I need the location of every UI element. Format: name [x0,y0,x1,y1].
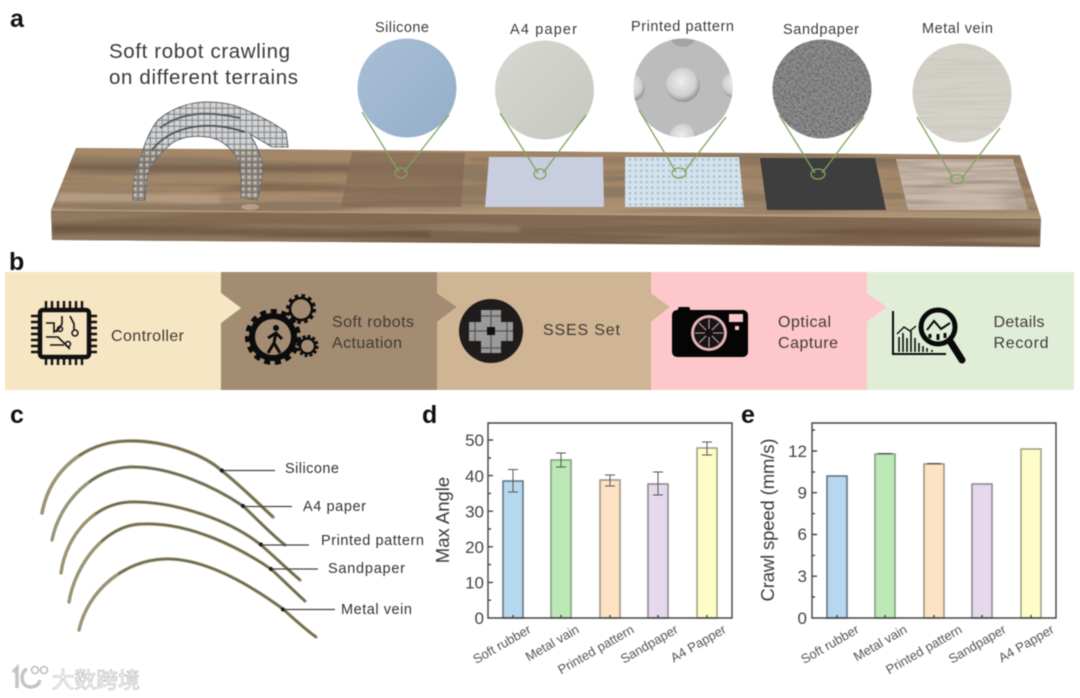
panel a: terrains [10,5,1050,253]
y-axis tick labels: 10 [465,574,484,592]
x-axis labels: Soft rubber [470,621,534,667]
step: optical capture [651,272,887,390]
error caps [878,454,941,464]
y-axis title: Max Angle [432,477,453,563]
zoom circle: printed pattern [633,38,733,180]
icon: camera [672,307,748,357]
text: optical capture: Capture [778,335,838,352]
label d: d [422,401,437,429]
x-axis labels: Printed pattern [883,622,964,677]
axes box [812,423,1056,618]
step: soft robots actuation [221,272,457,390]
text: soft robots actuation: Actuation [332,335,402,352]
x-axis labels: Soft rubber [798,621,862,667]
curve labels: Sandpaper [328,561,405,577]
panel b: workflow [5,248,1074,390]
text: optical capture: Optical [778,314,831,331]
zoom circle: A4 paper [495,40,594,179]
label e: e [741,401,755,429]
terrain patch: sandpaper [760,158,886,210]
text: details record [994,314,1048,352]
label b: b [9,248,24,276]
x-axis labels [798,621,1057,677]
bars [827,449,1041,618]
y-axis tick labels: 50 [465,431,484,450]
x-axis labels: A4 Papper [668,621,729,665]
icon: gears with walker [248,296,317,362]
x-axis labels: Sandpaper [946,621,1009,666]
panel d: max angle bar chart [422,401,732,677]
x-axis labels: Metal vain [523,622,582,664]
soft robot [133,102,288,210]
curve: metal vein [79,559,316,637]
y-axis tick labels [788,442,807,628]
text: SSES set: SSES Set [543,322,621,339]
text: soft robots actuation: Soft robots [332,314,414,331]
curve labels [285,461,424,618]
label a: a [10,5,25,33]
x-axis labels [470,621,729,677]
circle captions: Silicone [375,20,429,36]
step: controller [5,272,241,390]
curve labels: Printed pattern [321,533,424,549]
zoom circle: metal vein [910,41,1014,184]
x-axis labels: Printed pattern [555,622,636,677]
y-axis tick labels: 0 [475,609,484,628]
bars [503,448,717,618]
x-axis labels: Metal vain [851,622,910,664]
curve: printed pattern [61,502,300,580]
y-axis tick labels [465,431,484,628]
curve labels: Silicone [285,461,339,477]
circle captions: A4 paper [510,22,577,38]
terrain patch: silicone [341,152,465,207]
curve: silicone [42,441,273,517]
y-axis title: Crawl speed (mm/s) [757,438,778,602]
circle captions [375,19,993,38]
heading: soft robot crawling: Soft robot crawling [109,40,290,63]
wooden plank [40,145,1050,253]
x-axis labels: Sandpaper [618,621,681,666]
label c: c [10,401,24,429]
y-axis tick labels: 0 [798,609,807,628]
icon: chip [31,301,97,365]
heading: soft robot crawling [109,40,298,89]
text: controller: Controller [111,328,185,345]
step: SSES set [437,272,670,390]
zoom circle: sandpaper [770,37,874,179]
y-axis tick labels: 6 [798,525,807,544]
terrain patch: printed pattern [625,157,744,207]
y-axis tick labels: 40 [465,467,484,486]
text: details record: Record [994,335,1048,352]
y-axis tick labels: 9 [798,484,807,502]
y-axis tick labels: 30 [465,502,484,522]
heading: soft robot crawling: on different terrains [109,66,298,89]
circle captions: Metal vein [922,21,993,37]
step: details record [867,272,1074,390]
error bars [508,442,712,495]
y-axis tick labels: 3 [798,567,807,586]
x-axis labels: A4 Papper [996,621,1057,665]
circle captions: Sandpaper [783,22,859,38]
text: soft robots actuation [332,314,414,352]
icon: SSES cross [459,299,523,363]
curve leader lines [222,470,335,610]
text: optical capture [778,314,838,352]
y-axis tick labels: 20 [465,538,484,557]
icon: chart with magnifier [893,310,962,360]
curve: A4 paper [52,467,285,545]
curve labels: Metal vein [341,602,412,618]
zoom circle: silicone [358,38,456,178]
watermark [13,666,140,693]
panel e: crawl speed bar chart [741,401,1057,677]
terrain patch: metal vein [896,158,1028,210]
watermark: 大数跨境 [52,668,140,693]
circle captions: Printed pattern [631,19,734,35]
text: details record: Details [994,314,1044,331]
terrain patch: A4 paper [485,157,604,207]
y-axis tick labels: 12 [788,442,807,461]
curve: sandpaper [69,524,305,602]
curve labels: A4 paper [303,499,366,515]
axes box [488,423,732,618]
panel c: bending profiles [10,401,424,637]
